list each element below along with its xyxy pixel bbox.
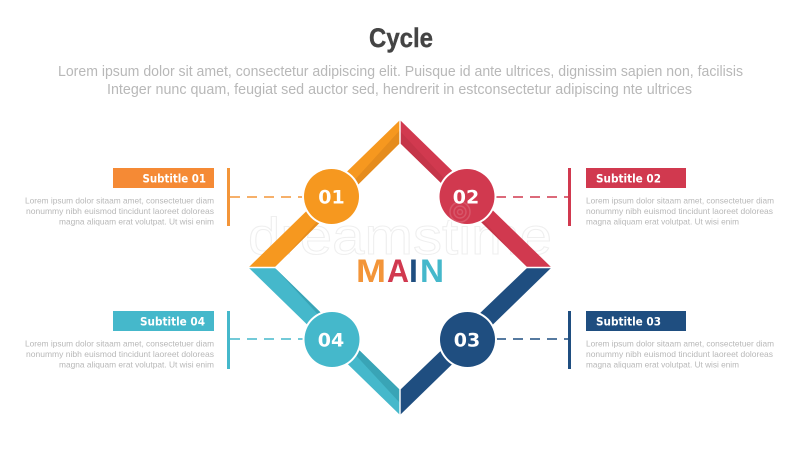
- connector 01: [230, 196, 304, 198]
- node 02: [438, 167, 496, 226]
- subtitle 03: Subtitle 03: [596, 314, 661, 328]
- subtitle 03: [586, 311, 686, 331]
- body text 02: [586, 196, 774, 226]
- body text 01: Lorem ipsum dolor sitaam amet, consectetuer diam: [25, 196, 214, 206]
- watermark: dreamstime: [248, 208, 552, 266]
- segment: orange: [249, 120, 400, 267]
- body text 01: magna aliquam erat volutpat. Ut wisi enim: [59, 216, 214, 226]
- white separators: [248, 119, 552, 416]
- center label: MAIN: [356, 253, 444, 289]
- body text 04: [25, 338, 214, 370]
- body text 01: [25, 196, 214, 226]
- segment: navy: [400, 268, 551, 415]
- subtitle 01: [113, 168, 214, 188]
- body text 03: Lorem ipsum dolor sitaam amet, consectetuer diam: [586, 338, 774, 348]
- node 04: 04: [318, 330, 344, 352]
- connector 03: [496, 338, 568, 340]
- subtitle 02: Subtitle 02: [596, 172, 661, 186]
- item 03: [438, 310, 774, 370]
- center label: MAIN: M: [356, 253, 386, 289]
- center label: MAIN: I: [409, 253, 418, 289]
- body text 04: nonummy nibh euismod tincidunt laoreet doloreas: [26, 349, 214, 359]
- body text 01: nonummy nibh euismod tincidunt laoreet doloreas: [26, 206, 214, 216]
- body text 02: Lorem ipsum dolor sitaam amet, consectetuer diam: [586, 196, 774, 206]
- node 03: [438, 310, 497, 369]
- segment: red: [400, 120, 551, 267]
- node 03: 03: [454, 330, 480, 352]
- connector 02: [496, 196, 568, 198]
- bar 04: [227, 311, 230, 369]
- body text 02: magna aliquam erat volutpat. Ut wisi enim: [586, 216, 739, 226]
- item 01: [25, 167, 361, 226]
- subtitle 02: [586, 168, 686, 188]
- intro text: Lorem ipsum dolor sit amet, consectetur adipiscing elit. Puisque id ante ultrices, dignissim sapien non, facilisis: [58, 63, 743, 80]
- watermark logo: [450, 202, 470, 222]
- segment: teal: [249, 268, 400, 415]
- subtitle 01: Subtitle 01: [142, 172, 206, 186]
- body text 03: [586, 338, 774, 370]
- title: Cycle: [369, 23, 433, 53]
- node 01: [302, 167, 361, 226]
- node 04: [302, 310, 362, 369]
- diamond cycle: [248, 119, 552, 416]
- connector 04: [230, 338, 304, 340]
- body text 04: magna aliquam erat volutpat. Ut wisi enim: [59, 360, 214, 370]
- body text 02: nonummy nibh euismod tincidunt laoreet doloreas: [586, 206, 773, 216]
- body text 03: magna aliquam erat volutpat. Ut wisi enim: [586, 360, 739, 370]
- node 02: 02: [453, 186, 479, 208]
- bar 02: [568, 168, 571, 226]
- node 01: 01: [318, 186, 345, 208]
- intro text: [58, 63, 743, 98]
- center label: MAIN: A: [387, 253, 409, 289]
- bar 01: [227, 168, 230, 226]
- item 02: [438, 167, 774, 226]
- center label: MAIN: N: [420, 253, 444, 289]
- subtitle 04: [113, 311, 214, 331]
- item 04: [25, 310, 362, 370]
- intro text: Integer nunc quam, feugiat sed auctor sed, hendrerit in estconsectetur adipiscing nte ultrices: [107, 81, 692, 98]
- bar 03: [568, 311, 571, 369]
- body text 04: Lorem ipsum dolor sitaam amet, consectetuer diam: [25, 338, 214, 348]
- body text 03: nonummy nibh euismod tincidunt laoreet doloreas: [586, 349, 773, 359]
- subtitle 04: Subtitle 04: [140, 314, 205, 328]
